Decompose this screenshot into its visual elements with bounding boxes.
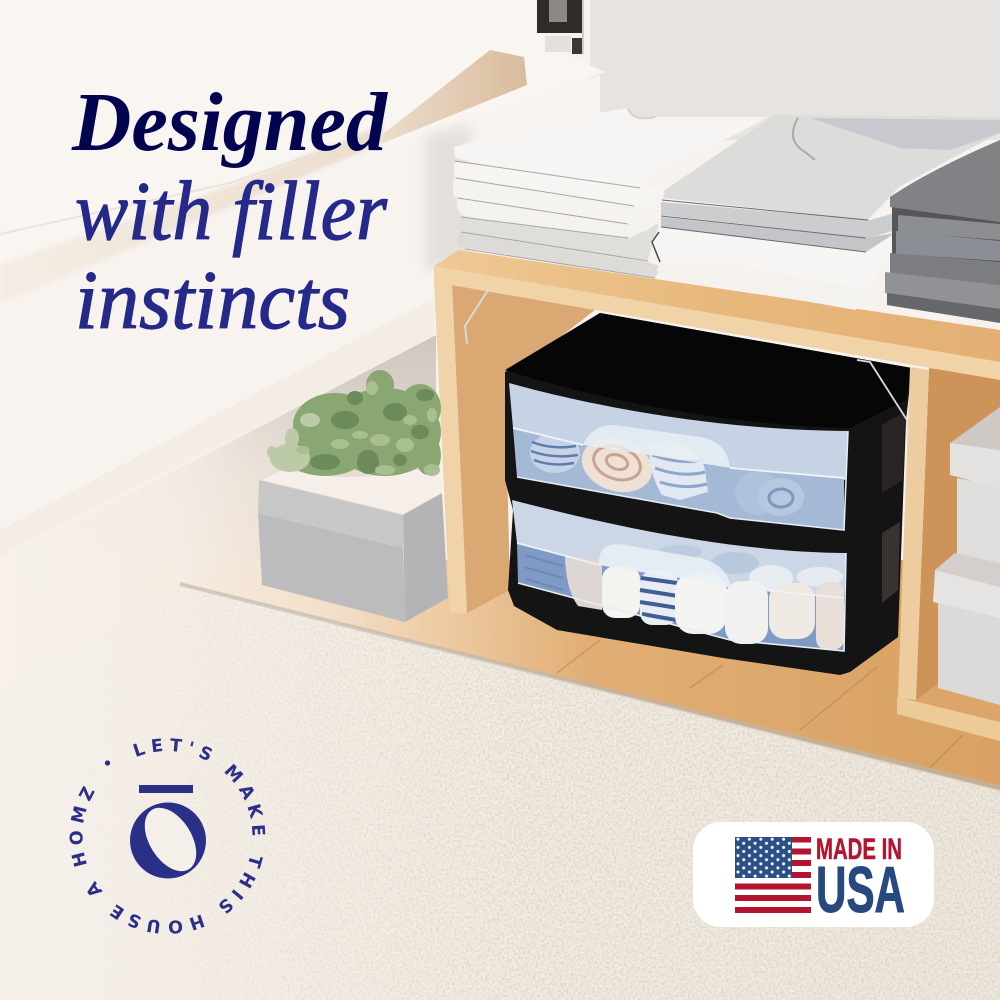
- cabinet top board: [434, 250, 1000, 380]
- cabinet right post: [898, 367, 929, 700]
- upper drawer handle: [583, 425, 730, 468]
- white pot: [262, 463, 442, 514]
- plant leaves: [267, 370, 441, 476]
- plant in fabric box: [258, 370, 448, 622]
- upper drawer socks: [530, 429, 804, 516]
- cabinet bottom board: [897, 697, 1000, 741]
- storage boxes: [933, 407, 1000, 705]
- drawer unit: [505, 313, 912, 675]
- lower drawer handle: [598, 544, 731, 588]
- upper drawer window: [509, 383, 848, 530]
- usa flag: [735, 837, 811, 913]
- logo letter o: [130, 799, 207, 880]
- fabric box: [258, 513, 405, 622]
- badge ring text: LET'S MAKE THIS HOUSE A HOMZ: [70, 738, 266, 934]
- shelf wire: [465, 290, 908, 435]
- blurred bed: [0, 0, 605, 562]
- title line: with filler: with filler: [75, 165, 387, 258]
- wood floor: [180, 560, 1000, 790]
- shaded wall behind plant: [0, 330, 436, 692]
- clothes stack: white shirts: [453, 108, 768, 278]
- title: [71, 76, 389, 347]
- cabinet right compartment: [916, 368, 1000, 706]
- clothes stack: grey and white shirts: [652, 115, 1000, 310]
- drawer frame: [505, 313, 912, 675]
- made in usa badge: [693, 822, 934, 927]
- badge dot: [105, 760, 110, 766]
- usa text: USA: [816, 853, 905, 926]
- lower drawer window: [512, 500, 846, 651]
- made in text: MADE IN: [816, 833, 902, 866]
- clothes stack: dark grey: [885, 140, 1000, 323]
- round brand badge: [70, 738, 266, 934]
- rug: [0, 582, 1000, 1000]
- title line: Designed: Designed: [71, 76, 389, 169]
- logo macron: [139, 785, 193, 793]
- lower drawer socks: [565, 545, 844, 650]
- storage cabinet: [434, 281, 1000, 741]
- blurred towel: [383, 50, 527, 143]
- title line: instincts: instincts: [75, 254, 350, 347]
- cabinet left panel: [434, 281, 467, 613]
- cabinet interior: [452, 285, 595, 613]
- wall hardware: [537, 0, 584, 54]
